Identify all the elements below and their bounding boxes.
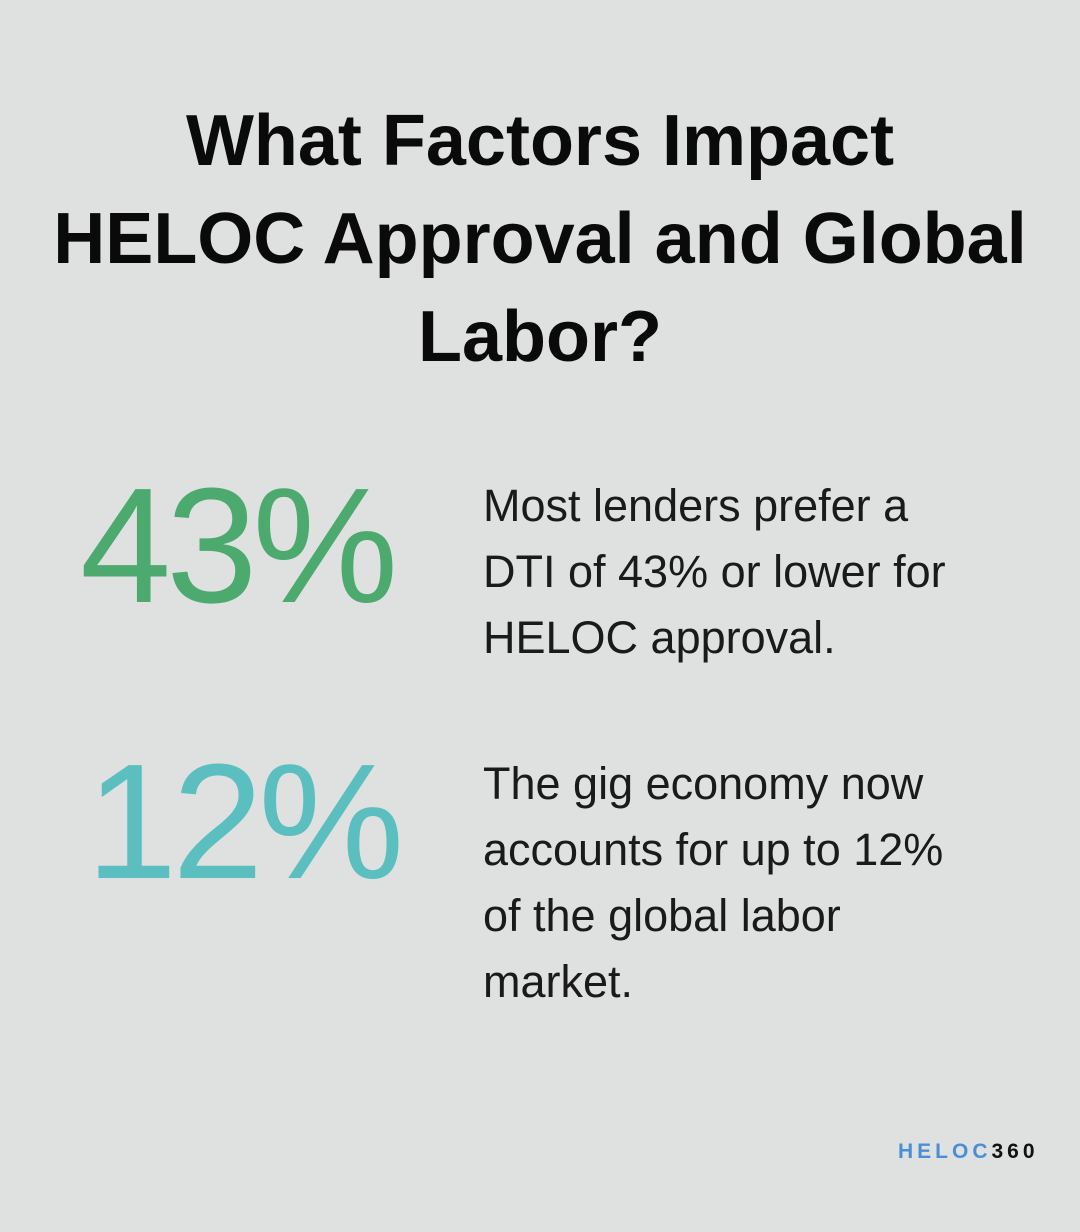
title: HELOC Approval and Global	[53, 199, 1027, 279]
stat: 43%: 43%	[80, 454, 393, 637]
text: gig economy	[483, 758, 943, 1007]
text: DTI: Most lenders prefer a	[483, 480, 908, 531]
text: gig economy: The gig economy now	[483, 758, 923, 809]
text: DTI	[483, 480, 946, 663]
text: DTI: HELOC approval.	[483, 612, 836, 663]
text: DTI: DTI of 43% or lower for	[483, 546, 946, 597]
title: Labor?	[418, 297, 662, 377]
title	[53, 101, 1027, 377]
title: What Factors Impact	[186, 101, 894, 181]
logo: HELOC360	[898, 1140, 1039, 1163]
text: gig economy: market.	[483, 956, 633, 1007]
stat: 12%: 12%	[86, 730, 399, 913]
text: gig economy: accounts for up to 12%	[483, 824, 943, 875]
text: gig economy: of the global labor	[483, 890, 841, 941]
